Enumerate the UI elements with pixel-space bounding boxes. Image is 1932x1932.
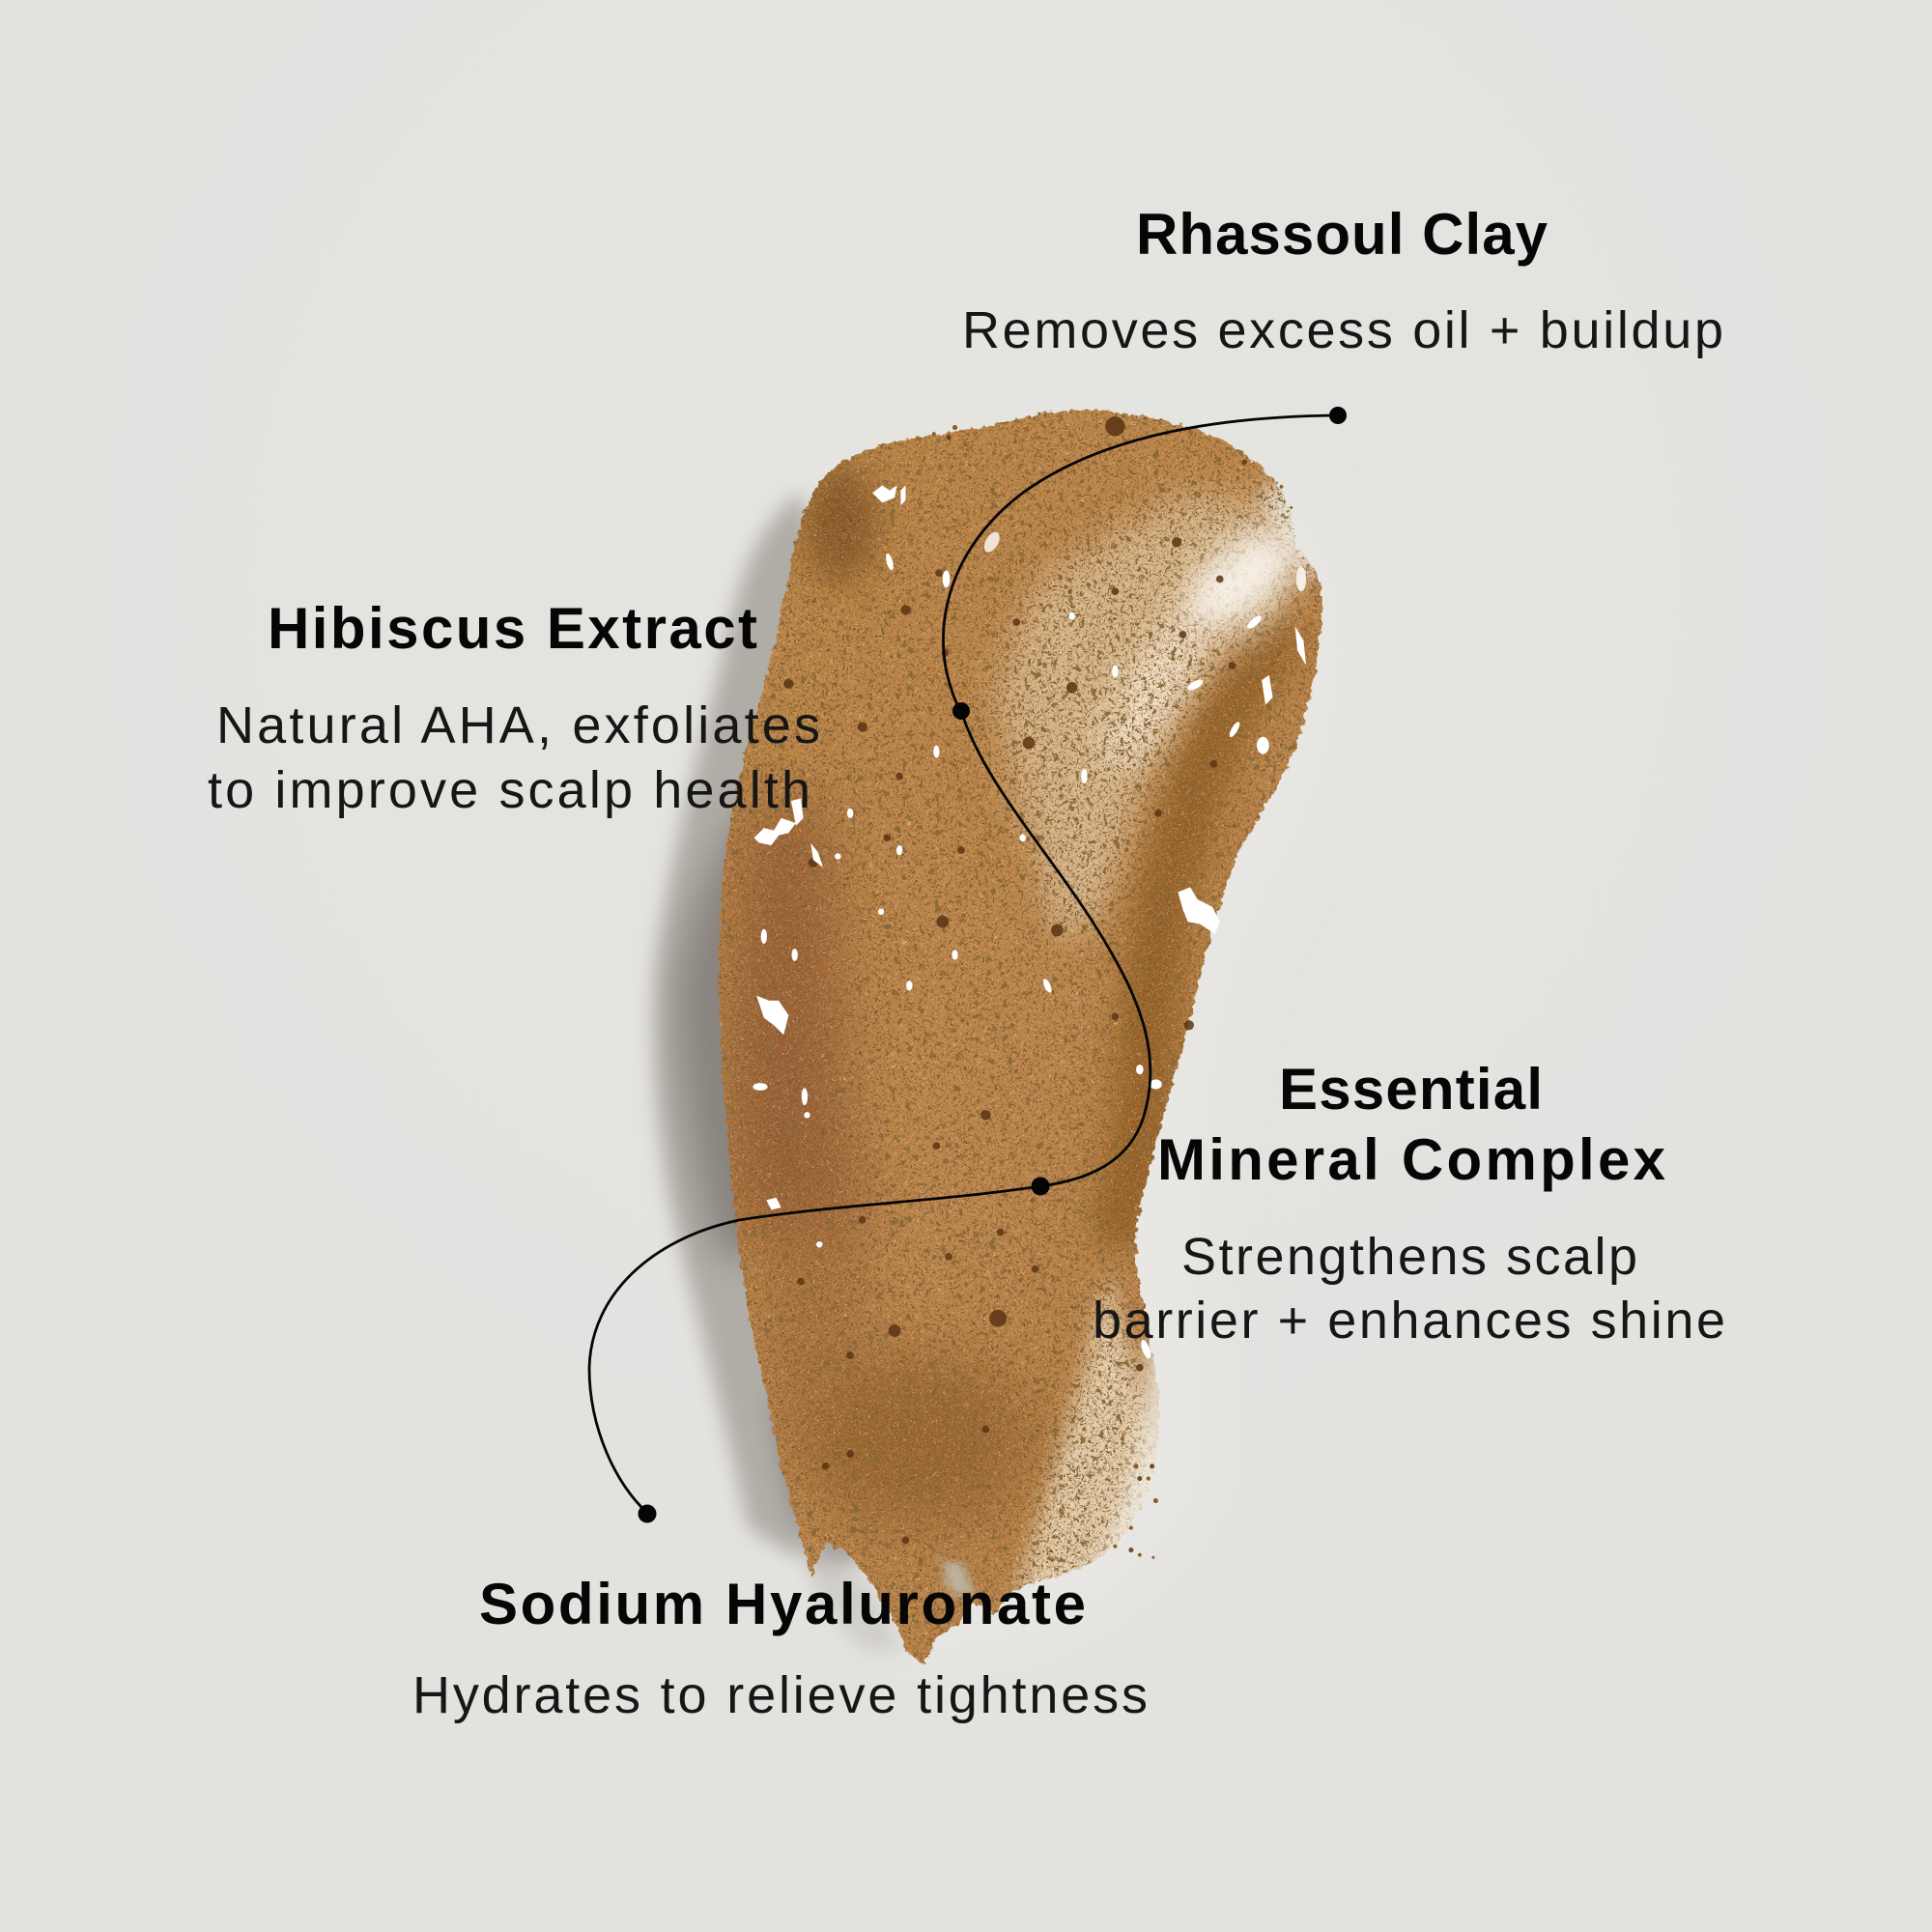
white flakes	[753, 486, 1306, 1360]
bright bare patch, upper right	[1164, 508, 1320, 650]
callout: Hibiscus Extract	[208, 596, 820, 819]
callout: Sodium Hyaluronate: Sodium Hyaluronate	[479, 1572, 1086, 1636]
marker dot: Sodium Hyaluronate	[638, 1505, 657, 1522]
callout: Hibiscus Extract: Hibiscus Extract	[268, 596, 757, 661]
cast shadow on left	[654, 493, 905, 1651]
dark clay granules	[783, 416, 1247, 1552]
marker dot: Hibiscus Extract	[952, 702, 970, 720]
callout: Essential Mineral Complex: Essential	[1279, 1057, 1543, 1122]
connector curve through all callouts	[589, 415, 1338, 1513]
callout: Sodium Hyaluronate	[412, 1572, 1148, 1724]
marker dot: Rhassoul Clay	[1329, 407, 1347, 424]
callout: Essential Mineral Complex	[1093, 1057, 1725, 1350]
callout: Essential Mineral Complex: barrier + enhances shine	[1093, 1292, 1725, 1350]
callout: Hibiscus Extract: Natural AHA, exfoliates	[216, 696, 820, 754]
halo glow around smear	[813, 493, 1334, 1651]
overspray specks on the right	[932, 425, 1293, 1559]
bright bare patch, lower right	[1078, 1333, 1160, 1569]
callout: Hibiscus Extract: to improve scalp health	[208, 761, 810, 819]
callout: Essential Mineral Complex: Strengthens scalp	[1181, 1228, 1637, 1286]
callout: Rhassoul Clay: Removes excess oil + buildup	[962, 301, 1723, 359]
callout: Sodium Hyaluronate: Hydrates to relieve tightness	[412, 1666, 1148, 1724]
smear body with tonal patches and speckle	[717, 409, 1323, 1664]
callout: Essential Mineral Complex: Mineral Complex	[1157, 1127, 1665, 1192]
swatch: scrub smear photo	[654, 394, 1355, 1688]
callout: Rhassoul Clay	[962, 202, 1723, 359]
callout: Rhassoul Clay: Rhassoul Clay	[1136, 202, 1548, 267]
glossy grey wedge at the bottom edge	[941, 1560, 976, 1597]
marker dot: Essential Mineral Complex	[1032, 1177, 1049, 1196]
